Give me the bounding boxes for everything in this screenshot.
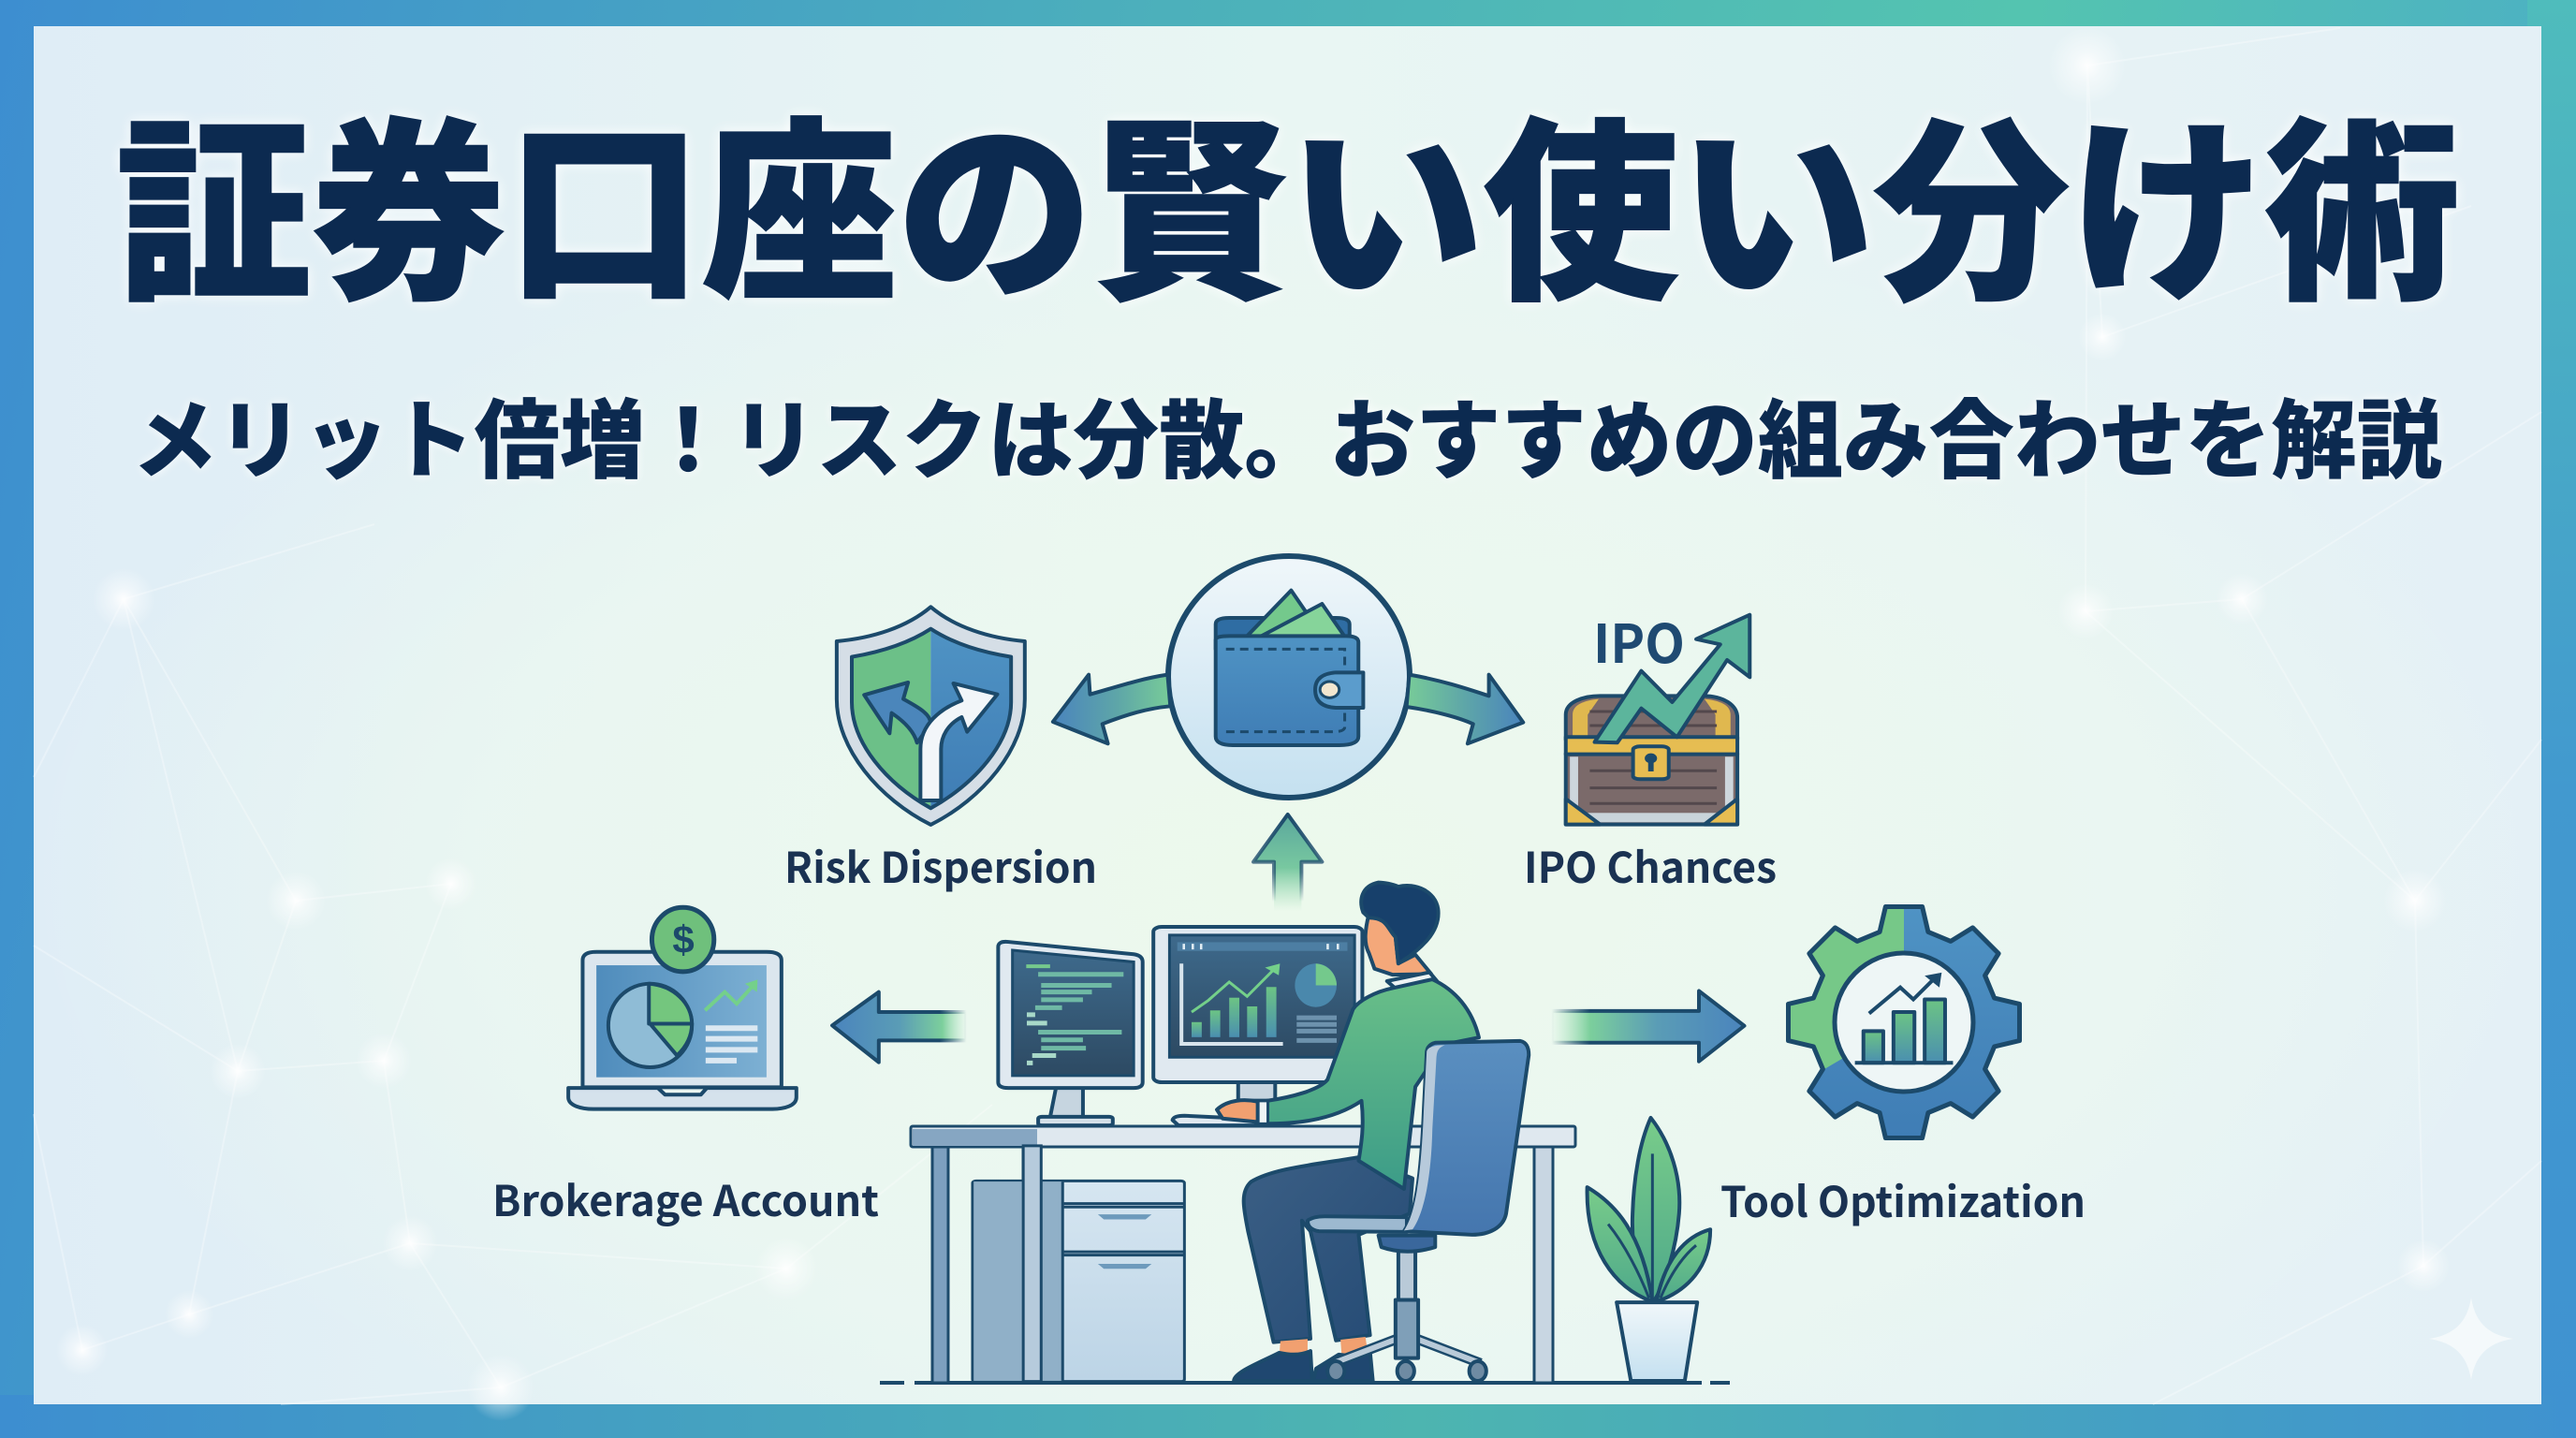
- seat: [1308, 1216, 1407, 1232]
- label: Tool Optimization: Tool Optimization: [1720, 1168, 2086, 1229]
- keyboard: [1173, 1116, 1256, 1125]
- office chair: [1308, 1041, 1529, 1381]
- rising arrow: [1595, 615, 1749, 742]
- icon: laptop with dollar coin: [568, 907, 797, 1109]
- desk legs: [932, 1146, 1553, 1383]
- icon: wallet in circle: [1168, 556, 1410, 798]
- collar: [1387, 973, 1437, 990]
- label: Brokerage Account: Brokerage Account: [492, 1167, 879, 1228]
- icon: IPO treasure chest: [1566, 602, 1749, 825]
- arrow: computer to brokerage account: [832, 992, 967, 1063]
- shoes: [1234, 1351, 1373, 1381]
- person at desk: [1217, 883, 1479, 1381]
- ankles: [1280, 1337, 1368, 1357]
- trousers: [1244, 1157, 1412, 1343]
- hand: [1217, 1100, 1258, 1122]
- title: 証券口座の賢い使い分け術: [116, 108, 2460, 325]
- icon: shield with split road: [837, 607, 1025, 825]
- chair base: [1333, 1335, 1481, 1363]
- arrow: wallet to IPO chest: [1407, 675, 1523, 743]
- subtitle: メリット倍増！リスクは分散。おすすめの組み合わせを解説: [132, 394, 2442, 490]
- shirt: [1266, 979, 1479, 1189]
- arrow: wallet to shield: [1053, 675, 1170, 743]
- desk: [911, 1126, 1575, 1383]
- arrow: computer up to wallet: [1253, 814, 1322, 911]
- cuff: [1258, 1101, 1268, 1123]
- dollar sign: $: [672, 917, 695, 961]
- backrest: [1404, 1041, 1529, 1235]
- ground line: [880, 1381, 1730, 1385]
- potted plant: [1588, 1118, 1710, 1381]
- desk top: [911, 1126, 1575, 1147]
- sparkle watermark: [2429, 1298, 2513, 1380]
- left monitor with code: [998, 942, 1143, 1125]
- IPO text: IPO: [1593, 602, 1685, 679]
- filing cabinet: [973, 1146, 1184, 1382]
- face and neck: [1366, 914, 1431, 975]
- right monitor with chart: [1153, 927, 1362, 1101]
- icon: gear with bar chart: [1788, 906, 2020, 1138]
- label: IPO Chances: IPO Chances: [1524, 834, 1777, 895]
- arrow: computer to tool optimization: [1551, 990, 1744, 1062]
- hair: [1361, 883, 1439, 963]
- chest body: [1566, 696, 1737, 825]
- label: Risk Dispersion: Risk Dispersion: [784, 834, 1097, 895]
